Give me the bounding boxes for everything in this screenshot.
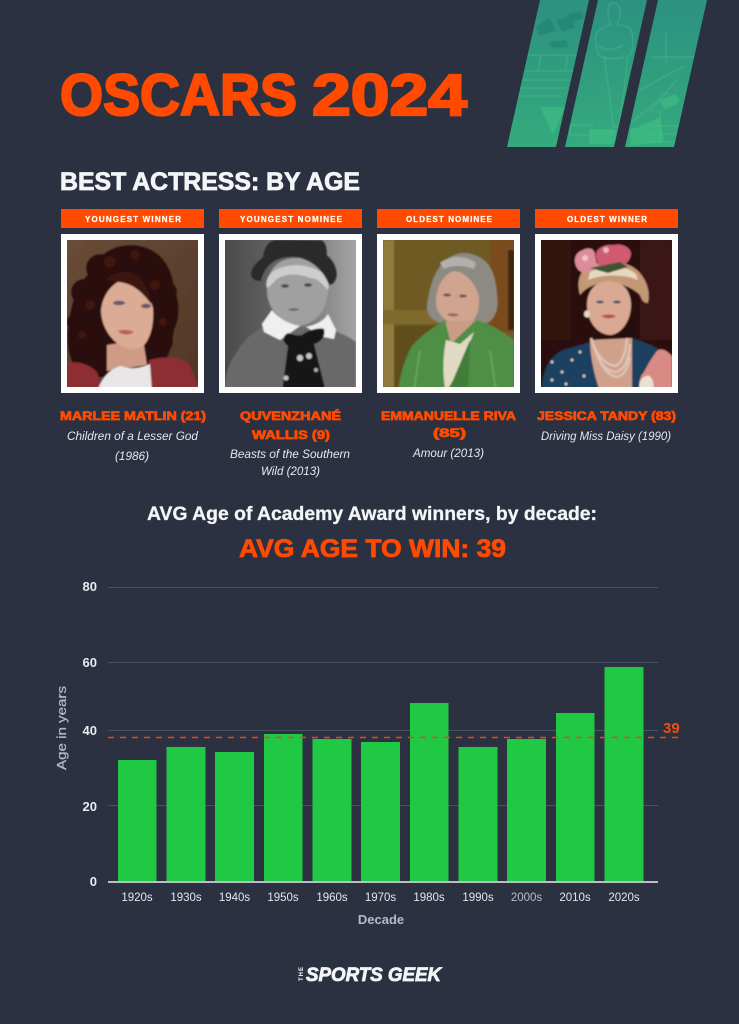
decade labels: 2020s: [608, 892, 640, 904]
bars: [118, 667, 644, 881]
photo: Jessica Tandy: [535, 234, 678, 393]
decade labels: 2010s: [559, 892, 591, 904]
logo: The Sports Geek: THE: [299, 967, 305, 981]
label: oldest nominee: OLDEST NOMINEE: [406, 215, 493, 224]
decade labels: 1930s: [170, 892, 202, 904]
decade labels: 1950s: [267, 892, 299, 904]
film: Beasts of the Southern Wild: Wild (2013): [261, 466, 320, 478]
decade labels: 1980s: [413, 892, 445, 904]
decade labels: 1920s: [121, 892, 153, 904]
grid lines and y axis labels: [83, 579, 658, 889]
card: youngest nominee: [219, 209, 362, 478]
photo: Marlee Matlin: [60, 234, 205, 393]
name: Emmanuelle Riva: EMMANUELLE RIVA: [381, 411, 516, 423]
photo: Emmanuelle Riva: [377, 234, 520, 393]
name: Jessica Tandy: JESSICA TANDY (83): [537, 411, 676, 423]
label: youngest nominee: YOUNGEST NOMINEE: [240, 215, 343, 224]
film: Children of a Lesser God: (1986): [115, 451, 149, 463]
film: Beasts of the Southern Wild: Beasts of the Southern: [230, 449, 350, 461]
average label: 39: [663, 720, 680, 737]
average age callout: AVG AGE TO WIN: 39: [239, 535, 506, 563]
name: Quvenzhane Wallis: [240, 410, 341, 442]
decade labels: 1990s: [462, 892, 494, 904]
section heading: BEST ACTRESS: BY AGE: [60, 168, 360, 196]
banner: three film stripes with Oscar statue: [507, 0, 707, 147]
label: youngest winner: [61, 209, 204, 228]
decade labels: 1960s: [316, 892, 348, 904]
decade labels: 2000s: [511, 892, 542, 904]
x axis: [108, 881, 658, 883]
film: Amour: Amour (2013): [412, 448, 484, 460]
grid lines and y axis labels: 80: [83, 579, 97, 594]
y axis title: Age in years: [54, 685, 69, 770]
title: OSCARS: [60, 63, 297, 128]
bar chart: [54, 579, 680, 927]
decade labels: 1970s: [365, 892, 396, 904]
chart heading: AVG Age of Academy Award winners, by decade:: [147, 503, 597, 525]
card: youngest winner: [60, 209, 206, 463]
title: 2024: [312, 63, 467, 128]
name: Marlee Matlin: MARLEE MATLIN (21): [60, 411, 206, 423]
grid lines and y axis labels: 40: [83, 723, 97, 738]
name: Emmanuelle Riva: [381, 411, 516, 440]
film: Children of a Lesser God: [67, 431, 199, 463]
label: oldest winner: [535, 209, 678, 228]
decade labels: 1940s: [219, 892, 250, 904]
grid lines and y axis labels: 20: [83, 799, 97, 814]
film: Beasts of the Southern Wild: [230, 449, 350, 478]
label: oldest winner: OLDEST WINNER: [567, 215, 647, 224]
decade labels: [121, 892, 640, 904]
name: Quvenzhane Wallis: QUVENZHANÉ: [240, 410, 341, 423]
card: oldest winner: [535, 209, 678, 443]
film: Driving Miss Daisy: Driving Miss Daisy (1990): [541, 431, 671, 443]
label: youngest winner: YOUNGEST WINNER: [85, 215, 181, 224]
grid lines and y axis labels: 0: [90, 874, 97, 889]
name: Emmanuelle Riva: (85): [433, 428, 466, 440]
logo: The Sports Geek: SPORTS GEEK: [306, 964, 443, 986]
label: youngest nominee: [219, 209, 362, 228]
photo: Quvenzhane Wallis: [219, 234, 362, 393]
film: Children of a Lesser God: Children of a Lesser God: [67, 431, 199, 443]
grid lines and y axis labels: 60: [83, 655, 97, 670]
card: oldest nominee: [377, 209, 520, 460]
label: oldest nominee: [377, 209, 520, 228]
average line: [108, 736, 680, 738]
name: Quvenzhane Wallis: WALLIS (9): [252, 430, 330, 442]
title: [60, 63, 467, 128]
x axis title: Decade: [358, 912, 404, 927]
